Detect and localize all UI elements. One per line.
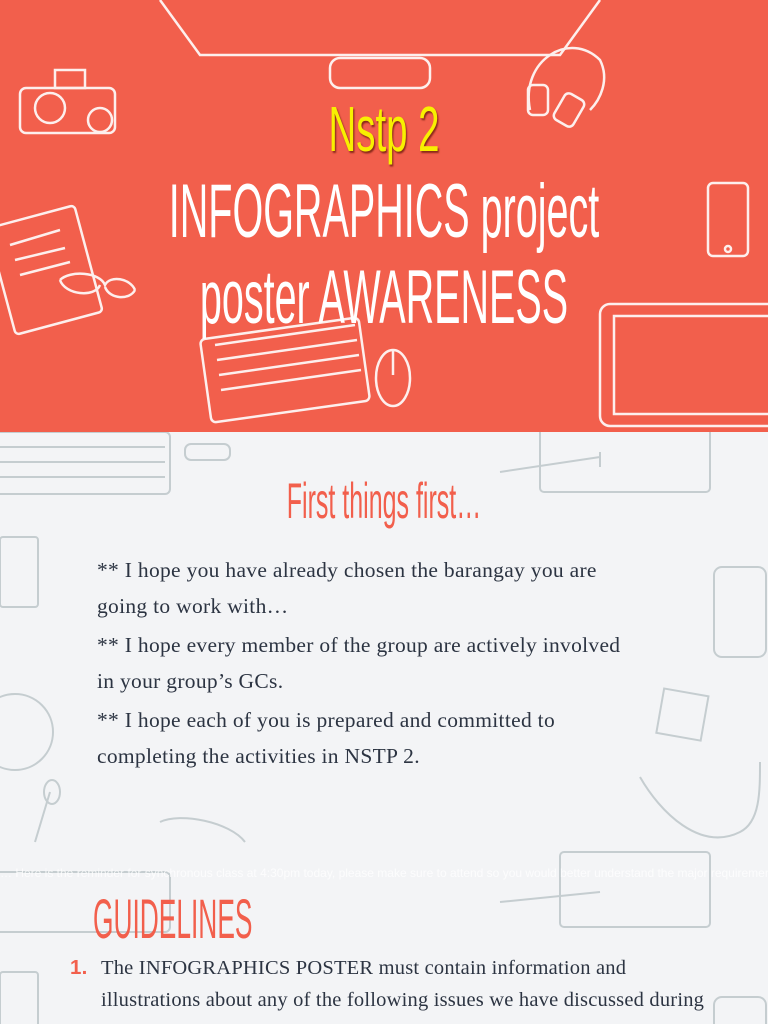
icons: background sketches slide 2 (0, 432, 767, 1024)
panel: header slide (0, 0, 768, 432)
icons: desk sketches (0, 0, 768, 428)
list item 1: 1. (70, 956, 88, 979)
heading: infographics project: INFOGRAPHICS project (169, 169, 599, 254)
text block: hopes: ** I hope each of you is prepared and committed to completing the activities in NSTP 2. (97, 708, 555, 768)
text block: hopes: ** I hope every member of the group are actively involved in your group’s GCs. (97, 633, 620, 693)
title: Nstp 2: Nstp 2 (329, 93, 439, 165)
text: faint notice: … Here is the reminder for synchronous class at 4:30pm today, please make sure to attend so you would better understand the major requirements (0, 866, 768, 880)
heading: first things first: First things first… (287, 473, 481, 529)
heading: guidelines: GUIDELINES (93, 887, 252, 950)
text block: hopes (97, 558, 620, 768)
text block: hopes: ** I hope you have already chosen the barangay you are going to work with… (97, 558, 597, 618)
heading: poster awareness: poster AWARENESS (200, 255, 568, 340)
